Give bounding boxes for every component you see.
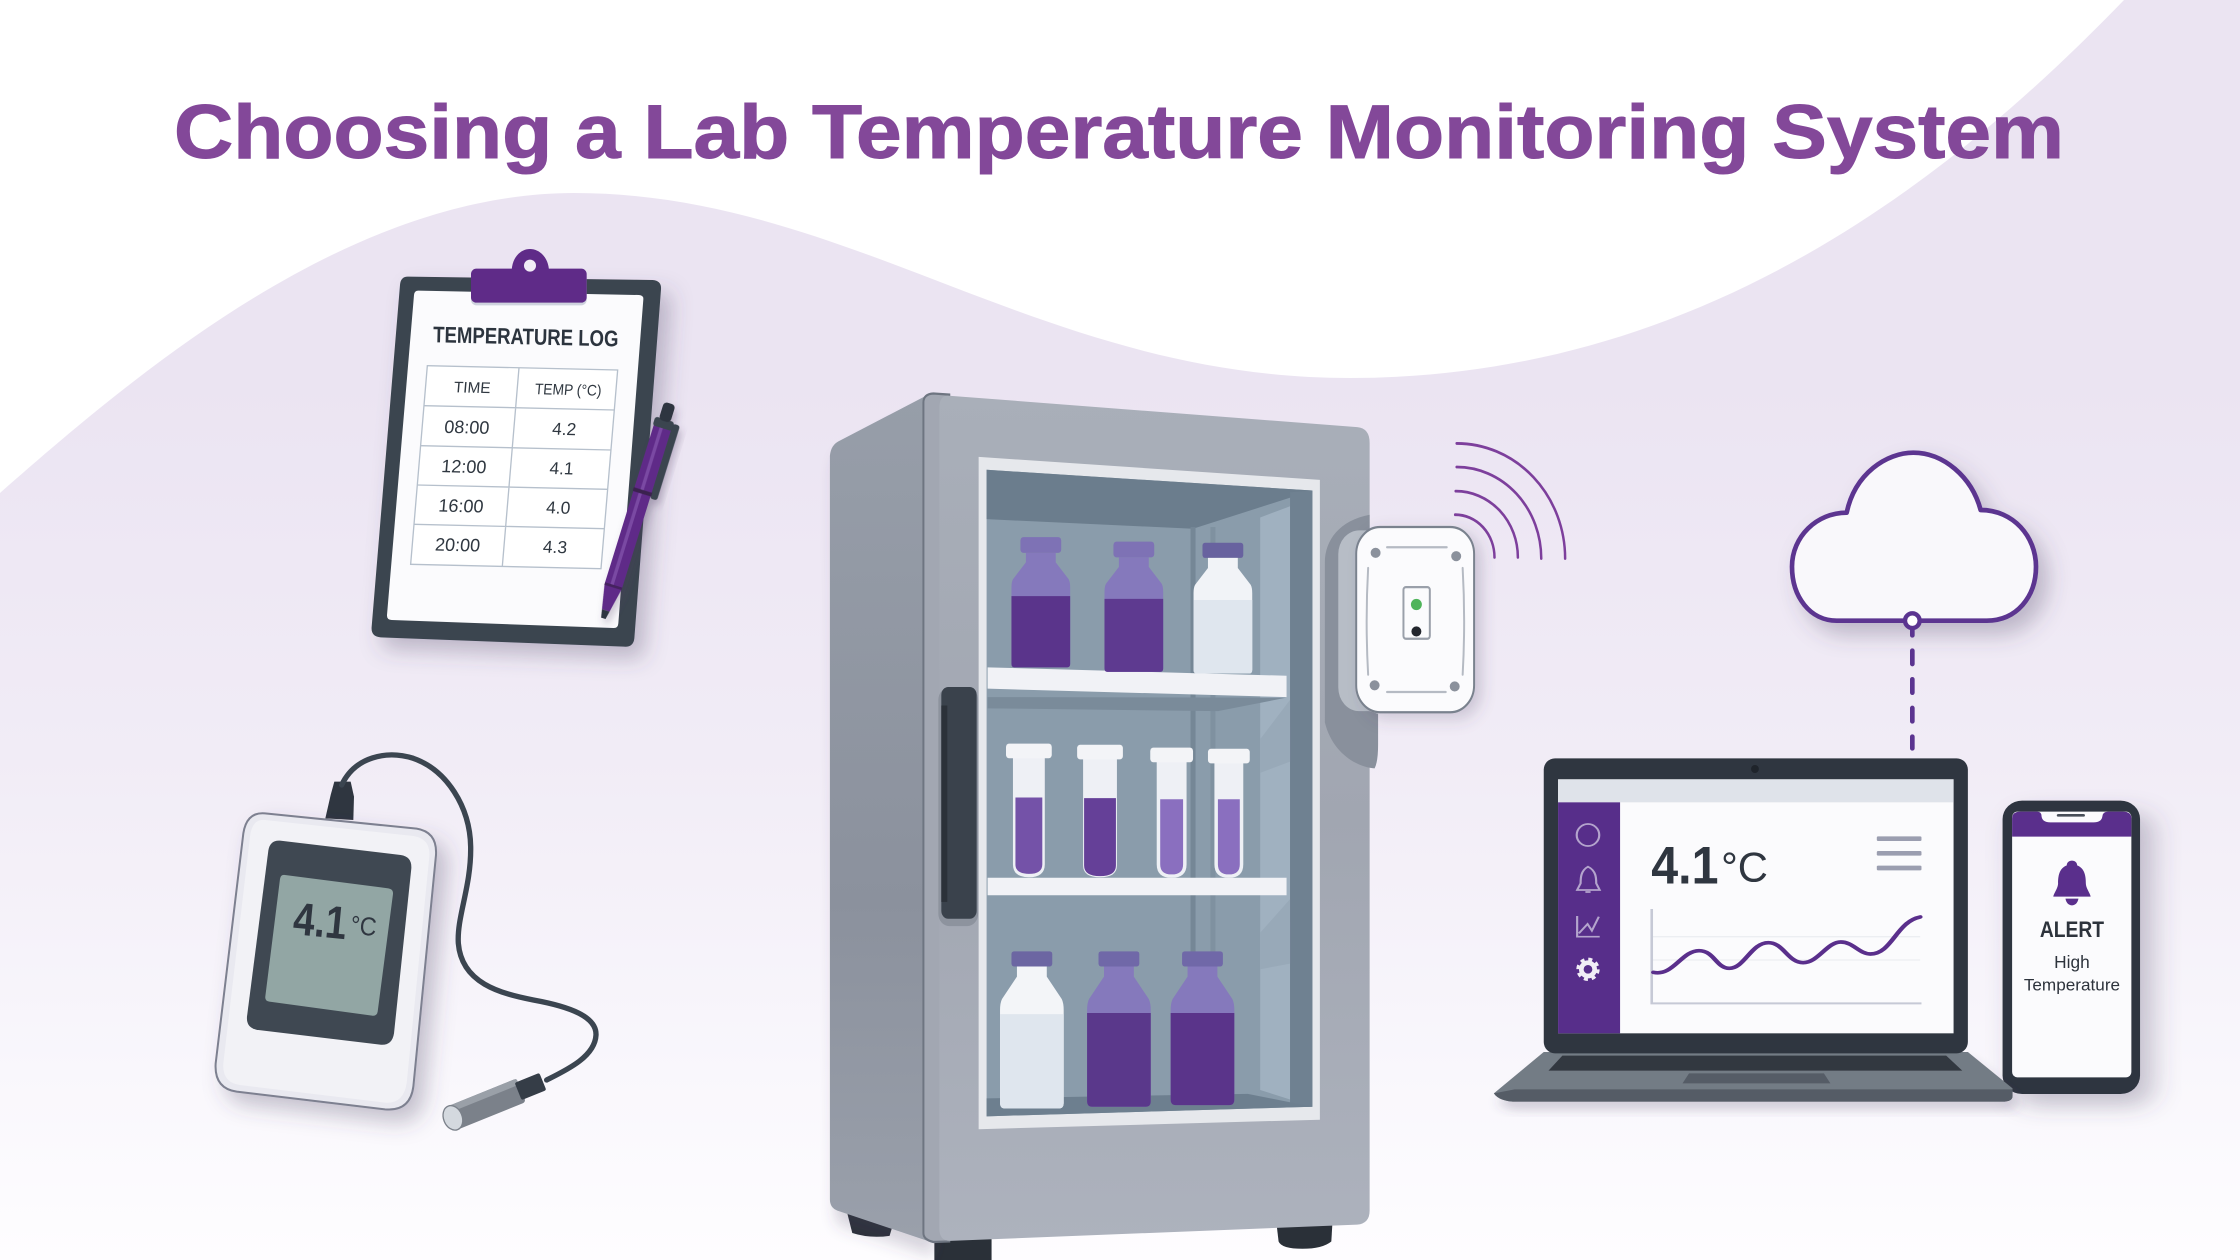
- tube two: [1077, 745, 1123, 877]
- data logger thermometer with probe: [216, 755, 596, 1133]
- large purple bottle two: [1171, 951, 1234, 1105]
- display bezel: [247, 841, 411, 1045]
- time column: [434, 417, 491, 556]
- time column: 08:00: [444, 417, 490, 438]
- feet: [847, 1213, 1332, 1260]
- icon: settings gear: [1578, 959, 1598, 979]
- paper sheet: [387, 291, 643, 628]
- phone screen: [2012, 812, 2131, 1077]
- top shelf bottles: [1011, 537, 1252, 674]
- metal probe: [440, 1070, 548, 1133]
- window frame: [979, 457, 1320, 1129]
- door front: [939, 396, 1370, 1241]
- refrigerator unit: [830, 393, 1565, 1260]
- browser bar: [1558, 779, 1954, 802]
- door handle: [938, 687, 978, 926]
- time column: 16:00: [438, 496, 484, 517]
- cloud shape: [1792, 453, 2036, 621]
- tube four: [1208, 749, 1250, 878]
- alert message: Temperature: [2024, 977, 2120, 995]
- wifi signal arcs: [1455, 443, 1565, 558]
- bottom shelf bottles: [1000, 951, 1234, 1108]
- alert message: High: [2054, 952, 2090, 972]
- title: Choosing a Lab Temperature Monitoring System: [174, 90, 2064, 175]
- clip: [471, 249, 587, 305]
- temperature reading: 4.1: [1651, 836, 1719, 895]
- connection node: [1905, 613, 1920, 628]
- lcd reading: 4.1: [291, 892, 349, 949]
- lcd screen: [265, 875, 393, 1016]
- logger body: [216, 813, 436, 1110]
- dashboard sidebar: [1558, 802, 1620, 1033]
- log heading: TEMPERATURE LOG: [433, 321, 619, 351]
- column headers: TIME: [453, 379, 491, 397]
- temperature column: 4.1: [549, 458, 575, 479]
- purple bottle two: [1104, 542, 1163, 672]
- clipboard with temperature log: [372, 249, 685, 647]
- laptop base: [1494, 1052, 2013, 1102]
- temperature column: 4.0: [545, 497, 571, 518]
- laptop screen: [1558, 779, 1954, 1033]
- temperature column: [541, 419, 578, 557]
- status module: [1403, 587, 1430, 639]
- sensor face: [1356, 527, 1474, 712]
- dashed link: [1905, 629, 1919, 748]
- large white bottle: [1000, 951, 1064, 1108]
- shelf upper: [988, 667, 1287, 697]
- pen: [594, 400, 685, 623]
- white bottle: [1194, 543, 1252, 674]
- phone: [2003, 801, 2140, 1094]
- temperature line chart: [1652, 909, 1921, 1003]
- sensor housing: [1338, 530, 1423, 711]
- temperature reading: °C: [1721, 844, 1768, 891]
- lcd reading: °C: [349, 910, 378, 942]
- icon: status circle: [1577, 824, 1599, 846]
- side panel: [830, 394, 929, 1241]
- test tubes: [1006, 744, 1250, 878]
- logger highlight: [223, 820, 429, 1103]
- shelf lower: [988, 878, 1287, 895]
- connector: [325, 782, 354, 820]
- temperature column: 4.2: [551, 419, 577, 439]
- icon: alert bell: [2053, 861, 2091, 905]
- purple bottle one: [1011, 537, 1070, 667]
- icon: chart: [1577, 916, 1600, 937]
- menu icon: [1877, 836, 1921, 870]
- sidebar icons: [1577, 824, 1600, 937]
- time column: 20:00: [434, 535, 481, 556]
- phone body: [2003, 801, 2140, 1094]
- large purple bottle one: [1087, 951, 1151, 1107]
- alert message: [2024, 952, 2120, 995]
- phone header: [2012, 812, 2131, 837]
- clipboard board: [372, 277, 661, 647]
- log table: [411, 366, 618, 569]
- alert text: ALERT: [2040, 918, 2104, 942]
- probe cable: [342, 755, 596, 1080]
- icon: bell: [1577, 867, 1600, 892]
- laptop lid: [1544, 758, 1968, 1053]
- wireless sensor: [1325, 515, 1474, 768]
- fridge interior: [987, 470, 1312, 1116]
- door edge: [923, 393, 949, 1242]
- laptop and phone: [1494, 758, 2140, 1102]
- tube one: [1006, 744, 1052, 877]
- cloud connection: [1792, 453, 2036, 748]
- tube three: [1150, 748, 1193, 878]
- column headers: [453, 379, 602, 400]
- time column: 12:00: [441, 456, 487, 477]
- sensor bracket: [1325, 515, 1378, 768]
- column headers: TEMP (°C): [534, 381, 602, 400]
- temperature column: 4.3: [542, 537, 568, 557]
